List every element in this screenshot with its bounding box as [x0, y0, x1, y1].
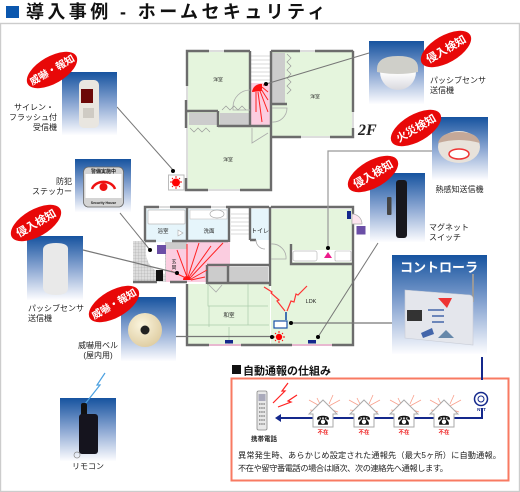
blue line network [275, 357, 488, 422]
floor plan: 1F: トイレ [251, 229, 269, 235]
entrance door [156, 270, 163, 281]
siren on plan icon [168, 175, 184, 190]
house phone 2 [349, 395, 380, 436]
badge: 侵入検知 magnet [342, 148, 404, 200]
house phone 2: 不在 [358, 428, 370, 436]
panel: controller [392, 255, 487, 354]
floor plan: 1F: LDK [306, 299, 317, 305]
house phone 3: ☎ [397, 413, 411, 428]
title: 導入事例 - ホームセキュリティ [26, 2, 329, 22]
panel: passive sensor left: 送信機 [28, 313, 52, 323]
2F hall alarm [252, 84, 268, 122]
badge: 威嚇・報知 top [21, 44, 83, 96]
house phone 1: 不在 [317, 428, 329, 436]
icon: mobile phone [251, 383, 297, 443]
sensor: window blue marks [225, 211, 351, 344]
icon: mobile phone: 携帯電話 [251, 434, 278, 443]
floor plan: 2F: 洋室 [223, 156, 233, 163]
panel: siren flash receiver: 受信機 [33, 122, 57, 132]
house phone 4: 不在 [438, 428, 450, 436]
house phone 4 [430, 395, 461, 436]
panel: remote control: リモコン [72, 462, 104, 471]
label: 2F: 2F [357, 122, 377, 139]
purple sensor [157, 245, 166, 254]
panel: passive sensor right: 送信機 [430, 85, 454, 95]
floor plan: 1F: 洗面 [203, 227, 215, 235]
entrance alarm [171, 243, 223, 280]
connector lines [83, 53, 432, 337]
heading: auto notification: 自動通報の仕組み [243, 364, 331, 378]
panel: alarm bell [78, 297, 176, 361]
house phone 1: ☎ [316, 413, 330, 428]
connector dots [148, 82, 330, 339]
badge: 侵入検知 magnet: 侵入検知 [350, 157, 396, 191]
badge: 火災検知: 火災検知 [393, 111, 439, 145]
panel: passive sensor left: パッシブセンサ [28, 303, 84, 313]
panel: siren flash receiver [9, 72, 117, 135]
panel: security sticker: 警備実施中 [91, 168, 116, 175]
panel: auto notification [232, 357, 508, 480]
panel: siren flash receiver: フラッシュ付 [9, 112, 57, 122]
house phone 2: ☎ [357, 413, 371, 428]
controller on plan [264, 286, 307, 328]
panel: alarm bell: (屋内用) [83, 350, 113, 360]
floor plan: 1F: 関 [172, 265, 177, 271]
description text: 不在や留守番電話の場合は順次、次の連絡先へ通報します。 [238, 463, 448, 473]
purple door sensor [352, 214, 366, 234]
panel: magnet switch [370, 173, 469, 242]
floor plan: 2F: 洋室 [213, 76, 223, 83]
badge: 威嚇・報知 bell: 威嚇・報知 [89, 286, 139, 322]
badge: 威嚇・報知 bell [83, 278, 145, 330]
house phone 1 [309, 395, 340, 436]
house phone 3 [390, 395, 421, 436]
house phone 3: 不在 [398, 428, 410, 436]
floor plan: 1F [133, 207, 366, 345]
panel: passive sensor left [27, 236, 84, 323]
panel: magnet switch: スイッチ [429, 233, 461, 242]
floor plan: 1F: 和室 [223, 311, 235, 319]
LDK fire burst [273, 331, 285, 343]
panel: security sticker: Security House [91, 201, 116, 205]
badge: 火災検知 [385, 102, 447, 154]
badge: 威嚇・報知 top: 威嚇・報知 [27, 52, 77, 88]
house phone 4: ☎ [437, 413, 451, 428]
panel: security sticker: 防犯 [56, 176, 72, 186]
panel: passive sensor right [369, 41, 486, 104]
panel: passive sensor right: パッシブセンサ [430, 75, 486, 85]
floor plan: 2F: 洋室 [310, 93, 320, 100]
badge: 侵入検知 left [5, 197, 67, 249]
description text: 異常発生時、あらかじめ設定された通報先（最大5ヶ所）に自動通報。 [238, 450, 501, 460]
badge: 侵入検知 right: 侵入検知 [423, 32, 469, 66]
floor plan: 1F: 玄 [172, 258, 177, 265]
panel: alarm bell: 威嚇用ベル [78, 340, 118, 350]
floor plan: 2F [186, 51, 377, 190]
kitchen heat sensor [324, 252, 332, 258]
blue line network: NTT [477, 407, 486, 412]
badge: 侵入検知 right [415, 23, 477, 75]
panel: controller: コントローラ [400, 260, 478, 275]
panel: heat sensor: 熱感知送信機 [436, 184, 484, 194]
panel: magnet switch: マグネット [429, 222, 469, 232]
panel: security sticker: ステッカー [32, 187, 72, 196]
panel: remote control [60, 373, 116, 471]
panel: siren flash receiver: サイレン・ [14, 103, 54, 112]
description text [238, 450, 501, 473]
badge: 侵入検知 left: 侵入検知 [13, 206, 59, 240]
panel: security sticker [32, 159, 131, 212]
floor plan: 1F: 浴室 [157, 227, 169, 235]
panel: heat sensor [432, 117, 488, 194]
